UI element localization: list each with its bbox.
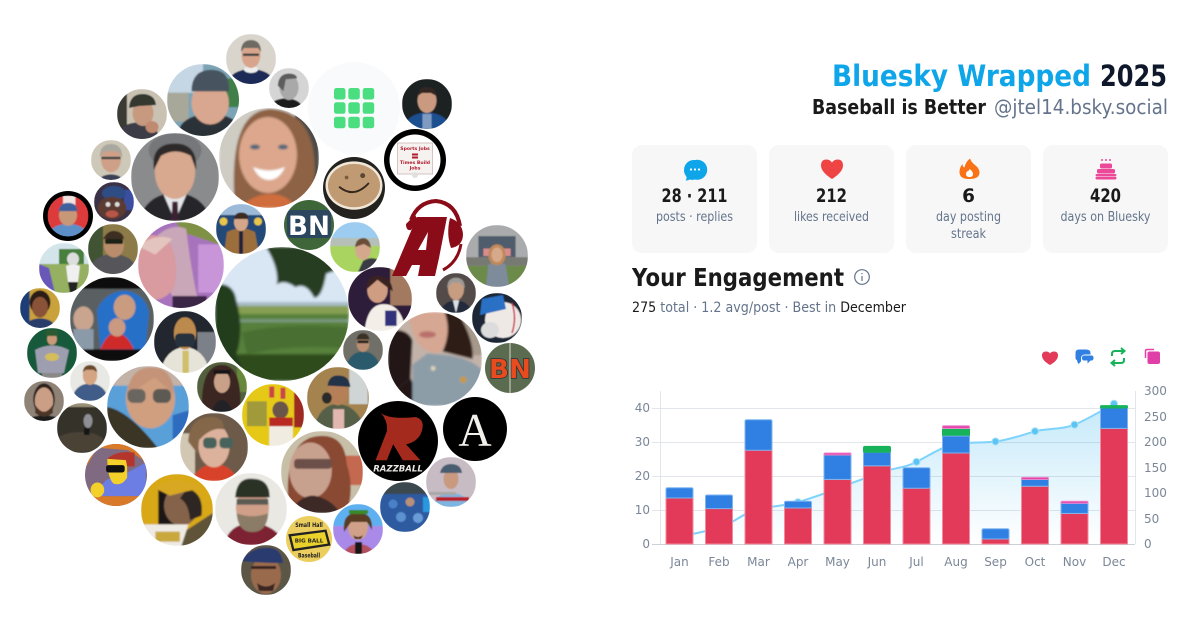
heading: Your Engagement: Your Engagement xyxy=(631,263,844,292)
panel: day posting streak: streak xyxy=(951,226,986,242)
avatar: man on phone with cap xyxy=(307,367,369,429)
month labels: Oct xyxy=(1025,555,1046,569)
avatar: selfie man with glasses xyxy=(107,366,189,448)
subtitle: display name and handle: Baseball is Better xyxy=(812,95,986,119)
avatar: woman in glasses, red hair xyxy=(281,431,363,513)
left axis labels: 20 xyxy=(635,469,650,483)
avatar: man with Blue Jays cap xyxy=(426,457,476,507)
avatar: Razzball logo: RAZZBALL xyxy=(373,464,423,474)
panel: likes received: likes received xyxy=(794,209,869,225)
avatar: woman at stadium xyxy=(466,225,528,287)
panel: days on Bluesky xyxy=(1043,145,1168,253)
month labels: Jan xyxy=(669,555,689,569)
avatar: bearded man xyxy=(24,381,64,421)
panel: posts and replies: 28 · 211 xyxy=(662,186,728,207)
month labels: Jul xyxy=(908,555,924,569)
avatar: Sports Jobs logo with ring xyxy=(384,129,446,191)
month labels: Nov xyxy=(1063,555,1086,569)
left axis labels: 0 xyxy=(642,537,650,551)
title: 2025 xyxy=(1100,59,1167,93)
engagement chart xyxy=(635,384,1167,569)
left axis labels: 30 xyxy=(635,435,650,449)
avatar: Sports Jobs logo with ring: Sports Jobs xyxy=(400,146,430,152)
icon: info xyxy=(855,270,869,284)
avatar: BN logo on ivy: BN xyxy=(288,211,330,242)
month labels: Dec xyxy=(1102,555,1126,569)
icon: reposts legend xyxy=(1112,348,1124,366)
avatar: bearded man in 1909 cap xyxy=(215,473,287,545)
month labels xyxy=(669,555,1126,569)
month labels: Mar xyxy=(747,555,770,569)
month labels: May xyxy=(825,555,850,569)
avatar: black and white portrait xyxy=(269,68,309,108)
avatar cluster xyxy=(20,34,535,595)
avatar: woman in baseball jersey xyxy=(348,267,412,331)
left axis labels: 10 xyxy=(635,503,650,517)
right axis labels: 250 xyxy=(1144,410,1167,424)
avatar: Mr. Met mascot xyxy=(472,293,522,343)
icon: cake xyxy=(1096,159,1116,180)
avatar: man in navy cap xyxy=(241,545,291,595)
right axis labels: 150 xyxy=(1144,461,1167,475)
icon: quotes legend xyxy=(1146,350,1160,364)
avatar: Sports Jobs logo with ring: Times Build xyxy=(400,160,430,166)
cumulative line xyxy=(680,404,1114,535)
avatar: man in navy sweater xyxy=(226,34,276,84)
bars: reposts xyxy=(864,406,1128,452)
panel: likes received: 212 xyxy=(816,186,847,207)
avatar: Small Hall Baseball logo xyxy=(286,516,332,562)
area under cumulative line xyxy=(680,404,1114,544)
avatar: bald man with mask xyxy=(154,311,216,373)
avatar: Small Hall Baseball logo: BIG BALL xyxy=(295,539,324,545)
avatar: Small Hall Baseball logo: Baseball xyxy=(298,551,320,559)
gridlines and axes xyxy=(652,391,1136,544)
avatar: woman in denim jacket xyxy=(388,312,482,406)
avatar: blonde woman on purple xyxy=(138,222,224,310)
panel: day posting streak: 6 xyxy=(962,186,975,207)
avatar: Campbell's soup display xyxy=(242,384,304,446)
icon: replies legend xyxy=(1076,350,1094,364)
engagement summary: 275 total · 1.2 avg/post · Best in December xyxy=(632,300,906,316)
icon: heart xyxy=(821,160,843,179)
icon: chat bubble xyxy=(684,160,707,181)
avatar: Sports Jobs logo with ring: Jobs xyxy=(409,166,421,172)
title: Bluesky Wrapped xyxy=(832,59,1091,93)
right axis labels: 0 xyxy=(1144,537,1152,551)
icon: likes legend xyxy=(1042,352,1058,365)
avatar: cartoon man with glasses xyxy=(85,444,147,506)
avatar: man in dark cap, hand on chin xyxy=(117,89,167,139)
avatar: man in blue suit on dark xyxy=(402,79,452,129)
avatar: BN logo on turf xyxy=(485,343,535,393)
avatar: The Athletic A logo xyxy=(443,397,507,461)
panel: days on Bluesky: 420 xyxy=(1090,186,1121,207)
avatar: man in suit on grey xyxy=(131,133,219,221)
panel: days on Bluesky: days on Bluesky xyxy=(1060,209,1151,225)
avatar: older man with glasses xyxy=(91,140,131,180)
avatar: woman with curly hair and glasses xyxy=(180,413,248,481)
right axis labels: 200 xyxy=(1144,435,1167,449)
logo: red A with headset xyxy=(392,201,463,276)
cumulative dots xyxy=(676,400,1118,539)
panel: likes received xyxy=(769,145,894,253)
avatar: marsh landscape xyxy=(215,247,349,381)
avatar: man in tan jacket, stars xyxy=(216,204,266,254)
month labels: Aug xyxy=(944,555,968,569)
stacked bars xyxy=(666,406,1128,544)
avatar: cyclist xyxy=(39,243,89,293)
right axis labels: 50 xyxy=(1144,512,1159,526)
avatar: man in blue polo xyxy=(70,361,110,401)
right axis labels: 100 xyxy=(1144,486,1167,500)
subtitle: display name and handle xyxy=(812,95,1168,119)
left axis labels: 40 xyxy=(635,401,650,415)
avatar: Small Hall Baseball logo: Small Hall xyxy=(295,521,323,529)
bars: likes xyxy=(666,428,1128,544)
avatar: curly-haired man on gradient xyxy=(333,504,383,554)
avatar: man at ballpark xyxy=(330,222,380,272)
left axis labels xyxy=(635,401,650,551)
avatar: The Athletic A logo: A xyxy=(458,405,492,456)
avatar: coffee smiley xyxy=(323,157,385,219)
avatar: batter in dim field xyxy=(56,403,107,453)
avatar: older man in suit xyxy=(436,273,476,313)
panel: posts and replies xyxy=(632,145,757,253)
avatar: man in yellow cap profile xyxy=(141,474,213,546)
avatar: man in sunglasses xyxy=(88,224,138,274)
month labels: Feb xyxy=(708,555,730,569)
month labels: Sep xyxy=(984,555,1007,569)
avatar: woman with curly dark hair xyxy=(197,362,247,412)
avatar: crowd in blue xyxy=(380,482,430,532)
subtitle: display name and handle: @jtel14.bsky.social xyxy=(994,95,1168,119)
avatar: man in grey cap xyxy=(167,64,239,136)
avatar: smiling woman with brown hair xyxy=(219,108,319,208)
right axis labels: 300 xyxy=(1144,384,1167,398)
avatar: smiling woman, blue and gold xyxy=(20,288,60,328)
panel: day posting streak xyxy=(906,145,1031,253)
panel: posts and replies: posts · replies xyxy=(656,209,733,225)
avatar: BN logo on turf: BN xyxy=(489,355,531,385)
chart legend icons xyxy=(1042,348,1160,366)
icon: flame xyxy=(960,158,980,179)
panel: day posting streak: day posting xyxy=(936,209,1001,225)
bars: quotes xyxy=(824,426,1088,503)
avatar: crowd with man in blue hoodie xyxy=(70,277,154,361)
bars: replies xyxy=(666,408,1128,539)
avatar: BN logo on ivy xyxy=(284,200,334,250)
avatar: Razzball logo xyxy=(358,401,438,481)
avatar: green app grid xyxy=(308,62,400,154)
avatar: player on green xyxy=(27,328,77,378)
avatar: man in Maine jersey xyxy=(343,330,383,370)
avatar: mascot xyxy=(94,182,134,222)
avatar: man in blue with black ring xyxy=(43,191,93,245)
month labels: Jun xyxy=(867,555,886,569)
right axis labels xyxy=(1144,384,1167,551)
month labels: Apr xyxy=(788,555,808,569)
